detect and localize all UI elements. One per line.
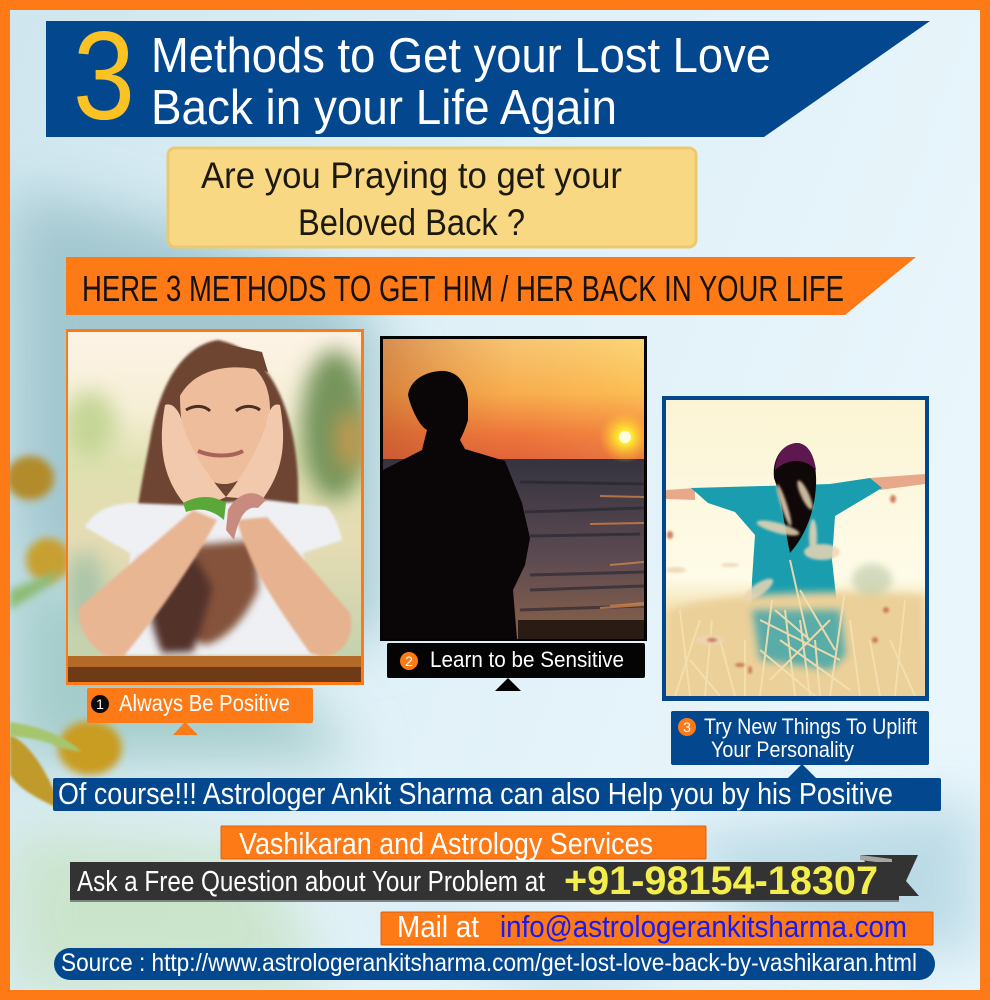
fringe bbox=[178, 342, 268, 400]
shirt bbox=[85, 500, 342, 655]
wheat field bbox=[666, 586, 925, 672]
dress bbox=[691, 478, 882, 602]
face bbox=[180, 358, 270, 484]
caption 3 bbox=[671, 711, 929, 778]
caption 3: Your Personality bbox=[711, 737, 854, 762]
hair bbox=[136, 338, 300, 507]
title line 1: Methods to Get your Lost Love bbox=[151, 29, 771, 83]
title line 2: Back in your Life Again bbox=[151, 81, 617, 135]
number badge 1: 1 bbox=[96, 696, 104, 712]
number badge 2 bbox=[400, 652, 418, 670]
eyes and mouth bbox=[186, 406, 260, 411]
big number 3: 3 bbox=[73, 7, 135, 146]
number badge 1 bbox=[91, 695, 109, 713]
man silhouette bbox=[383, 371, 530, 639]
caption 1: Always Be Positive bbox=[119, 690, 290, 716]
wooden rail bbox=[68, 667, 361, 682]
caption 3: Try New Things To Uplift bbox=[704, 714, 917, 739]
title banner bbox=[46, 7, 930, 146]
mail bar: info@astrologerankitsharma.com bbox=[500, 909, 907, 944]
arms bbox=[79, 510, 217, 658]
arms skin bbox=[666, 474, 925, 500]
mail bar: Mail at bbox=[397, 909, 479, 944]
phone ribbon: Ask a Free Question about Your Problem at bbox=[77, 866, 545, 898]
question box bbox=[168, 148, 696, 247]
caption 2: Learn to be Sensitive bbox=[430, 647, 624, 672]
phone number: +91-98154-18307 bbox=[564, 859, 878, 903]
orange subheading banner bbox=[66, 257, 916, 315]
bracelets bbox=[183, 497, 226, 520]
hair over chest bbox=[140, 553, 212, 653]
photo 3: woman in wheat field bbox=[662, 396, 929, 701]
photo 1: smiling girl bbox=[64, 329, 369, 685]
photo 2: silhouette at sunset bbox=[380, 336, 651, 641]
question box: Are you Praying to get your bbox=[201, 155, 622, 196]
hands bbox=[162, 404, 226, 512]
source bar: Source : http://www.astrologerankitsharma.com/get-lost-love-back-by-vashikaran.html bbox=[61, 949, 917, 977]
chest bbox=[175, 540, 258, 645]
number badge 2: 2 bbox=[405, 653, 413, 669]
hair bbox=[774, 443, 816, 553]
number badge 3 bbox=[678, 718, 696, 736]
number badge 3: 3 bbox=[683, 719, 691, 735]
caption 2 bbox=[387, 643, 645, 691]
question box: Beloved Back ? bbox=[298, 202, 525, 243]
services bar: Vashikaran and Astrology Services bbox=[239, 826, 653, 861]
caption 1 bbox=[87, 688, 313, 735]
phone ribbon bbox=[70, 855, 919, 903]
